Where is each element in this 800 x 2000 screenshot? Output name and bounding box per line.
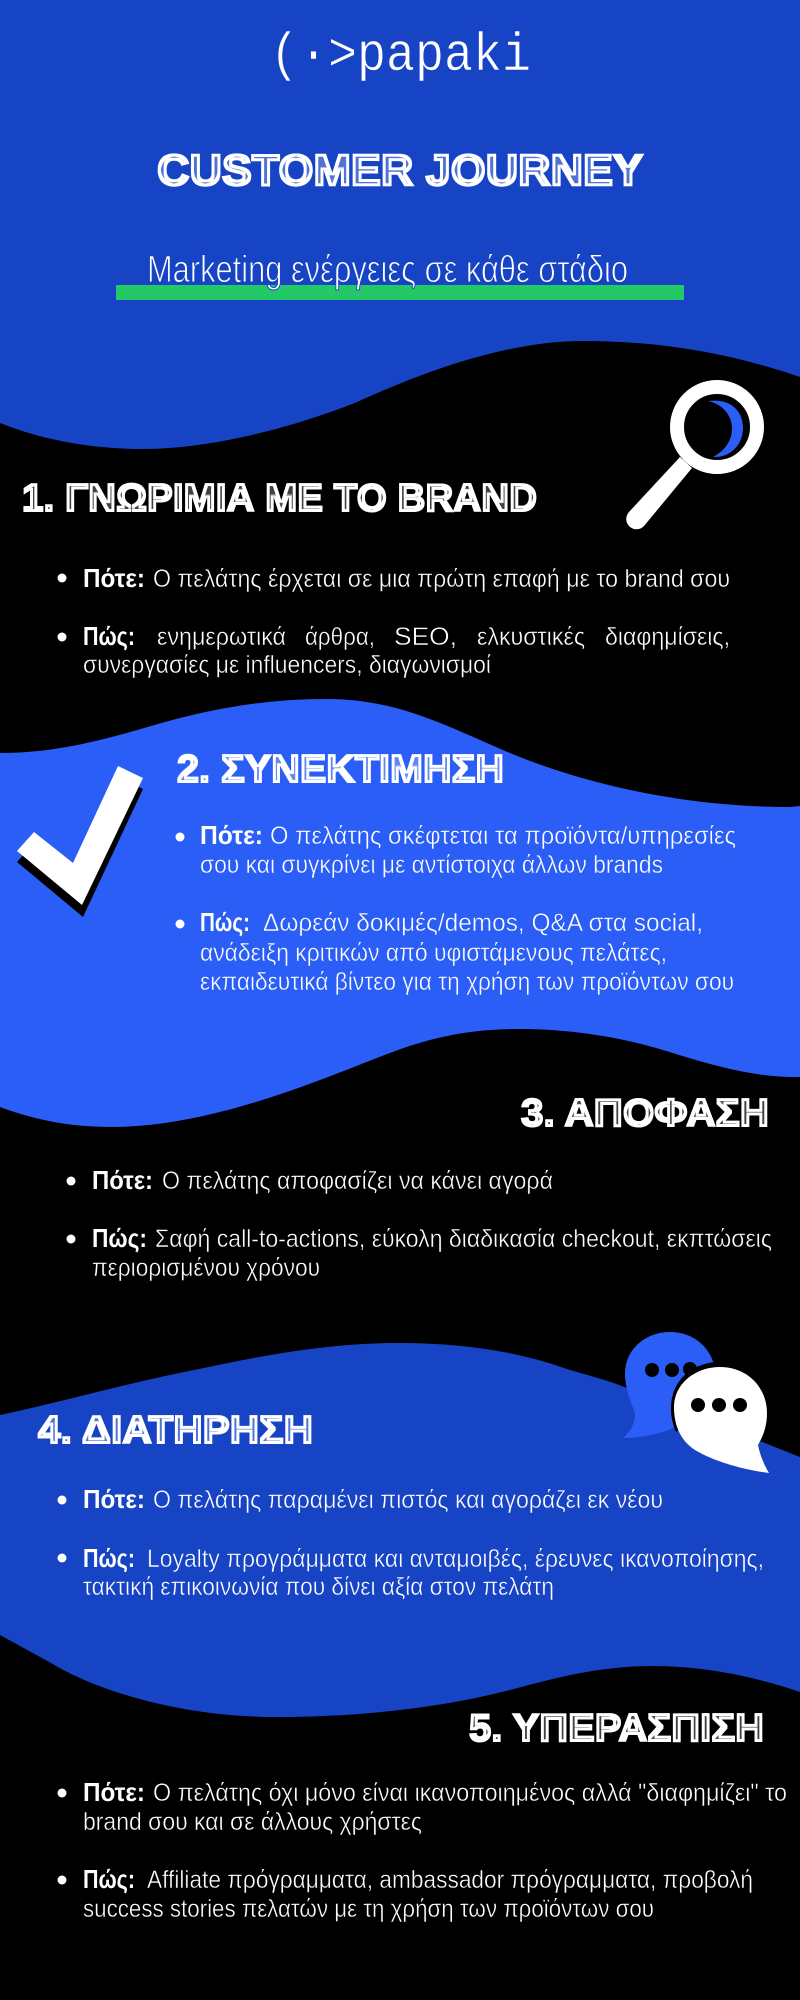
bullet: how: εκπαιδευτικά βίντεο για τη χρήση των προϊόντων σου [200, 968, 734, 996]
bullet: how: Affiliate πρόγραμματα, ambassador πρόγραμματα, προβολή [147, 1866, 753, 1894]
section 2 [176, 748, 736, 996]
bullet: how: ενημερωτικά [157, 623, 286, 651]
bullet: how: ανάδειξη κριτικών από υφιστάμενους πελάτες, [200, 939, 667, 967]
bullet: when: Ο πελάτης παραμένει πιστός και αγοράζει εκ νέου [153, 1486, 663, 1514]
icon: check mark [17, 766, 143, 917]
header background wave [0, 0, 800, 449]
bullet: how [66, 1223, 772, 1282]
bullet: how [58, 1543, 764, 1601]
section 1 [22, 477, 730, 679]
bullet: when: Πότε: [83, 1777, 145, 1807]
bullet: when: Ο πελάτης έρχεται σε μια πρώτη επαφή με το brand σου [153, 565, 730, 593]
bullet: how: ελκυστικές [477, 623, 585, 651]
heading: 5: 5. ΥΠΕΡΑΣΠΙΣΗ [469, 1707, 764, 1750]
bullet: how: Πώς: [200, 907, 250, 937]
bullet: when: brand σου και σε άλλους χρήστες [83, 1808, 422, 1836]
bullet: how [58, 1864, 753, 1923]
section 4 [38, 1409, 764, 1601]
bullet: how: success stories πελατών με τη χρήση των προϊόντων σου [83, 1895, 654, 1923]
bullet: how: συνεργασίες με influencers, διαγωνισμοί [83, 651, 491, 679]
section 2 background wave [0, 699, 800, 1127]
bullet: how: SEO, [394, 623, 457, 651]
icon: magnifying glass [626, 387, 757, 529]
bullet: how: Δωρεάν δοκιμές/demos, Q&A στα social, [263, 909, 703, 937]
bullet: when [58, 1777, 787, 1836]
bullet: how: διαφημίσεις, [605, 623, 730, 651]
bullet: when: Πότε: [200, 820, 263, 850]
section 4 background wave [0, 1343, 800, 1717]
bullet: when: Πότε: [83, 1484, 145, 1514]
bullet: when: Πότε: [83, 563, 145, 593]
bullet: how [58, 621, 730, 679]
bullet: how: Loyalty προγράμματα και ανταμοιβές, έρευνες ικανοποίησης, [147, 1545, 764, 1573]
heading: 3: 3. ΑΠΟΦΑΣΗ [521, 1092, 769, 1135]
icon: speech bubbles [623, 1332, 769, 1473]
bullet: how: Πώς: [92, 1223, 147, 1253]
bullet: when: Ο πελάτης αποφασίζει να κάνει αγορά [162, 1167, 553, 1195]
bullet: when: Ο πελάτης σκέφτεται τα προϊόντα/υπηρεσίες [270, 822, 736, 850]
bullet: how: άρθρα, [305, 623, 375, 651]
bullet: how: περιορισμένου χρόνου [92, 1254, 320, 1282]
heading: 2: 2. ΣΥΝΕΚΤΙΜΗΣΗ [177, 748, 504, 791]
bullet: how: Πώς: [83, 621, 135, 651]
bullet: when: Πότε: [92, 1165, 153, 1195]
bullet: how: Πώς: [83, 1543, 135, 1573]
bullet: how: Πώς: [83, 1864, 135, 1894]
bullet: how [176, 907, 734, 996]
bullet: when [176, 820, 736, 879]
logo: papaki: (·>papaki [270, 26, 531, 87]
bullet: when: σου και συγκρίνει με αντίστοιχα άλλων brands [200, 851, 663, 879]
subtitle with green underline: Marketing ενέργειες σε κάθε στάδιο [147, 249, 628, 291]
heading: 4: 4. ΔΙΑΤΗΡΗΣΗ [38, 1409, 313, 1452]
title: CUSTOMER JOURNEY [157, 146, 643, 195]
bullet: how: τακτική επικοινωνία που δίνει αξία στον πελάτη [83, 1573, 554, 1601]
section 5 [58, 1707, 787, 1923]
section 3 [66, 1092, 772, 1282]
heading: 1: 1. ΓΝΩΡΙΜΙΑ ΜΕ ΤΟ BRAND [22, 477, 537, 520]
